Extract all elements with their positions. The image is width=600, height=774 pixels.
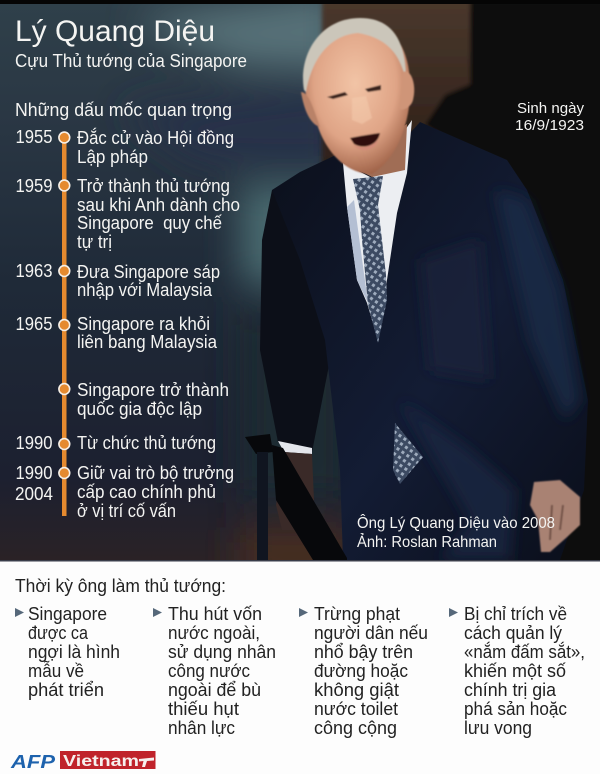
column 3: nước toilet [314, 699, 398, 719]
birth date: Sinh ngày [517, 100, 584, 117]
shirt [343, 120, 412, 340]
divider [0, 560, 600, 562]
milestone independence: Singapore trở thành [77, 380, 229, 400]
column 4: phá sản hoặc [464, 699, 567, 719]
timeline heading: Những dấu mốc quan trọng [15, 100, 232, 120]
column 4: chính trị gia [464, 680, 557, 700]
head [301, 18, 414, 174]
photo caption: Ông Lý Quang Diệu vào 2008 [357, 513, 555, 532]
column 1: phát triển [28, 680, 104, 700]
logo: Vietnam+ [60, 751, 156, 770]
column 4 [449, 604, 585, 738]
bullet [15, 608, 24, 617]
milestone 1959: tự trị [77, 232, 112, 252]
milestone 1990-2004 [15, 463, 234, 521]
column 2: nước ngoài, [168, 623, 260, 643]
column 4: Bị chỉ trích về [464, 604, 567, 624]
photo: statesman figure [245, 18, 588, 560]
milestone 1955 [16, 127, 234, 167]
photo caption [357, 513, 555, 551]
column 1: ngợi là hình [28, 642, 120, 662]
milestone 1990-2004: 2004 [15, 484, 53, 504]
milestone 1990-2004: Giữ vai trò bộ trưởng [77, 463, 234, 483]
column 4: «nắm đấm sắt», [464, 641, 585, 662]
column 2: ngoài để bù [168, 680, 261, 700]
milestone 1965: Singapore ra khỏi [77, 314, 210, 334]
milestone 1955: Đắc cử vào Hội đồng [77, 127, 234, 148]
column 3: không giật [314, 680, 399, 700]
tie [353, 176, 387, 343]
timeline line [62, 137, 66, 516]
milestone 1963: 1963 [16, 261, 52, 281]
column 4: khiến một số [464, 661, 566, 681]
column 3: Trừng phạt [314, 604, 400, 624]
milestone 1963: nhập với Malaysia [77, 280, 213, 300]
suit jacket [272, 122, 588, 560]
milestone 1955: 1955 [16, 127, 52, 147]
ears [402, 71, 416, 109]
milestone 1959: Singapore quy chế [77, 213, 222, 233]
bullet [153, 608, 162, 617]
neck [362, 124, 407, 177]
milestone 1965: liên bang Malaysia [77, 332, 218, 352]
right hand [530, 480, 580, 552]
title: Lý Quang Diệu [15, 15, 215, 48]
column 3: đường hoặc [314, 661, 408, 681]
column 1: Singapore [28, 604, 107, 624]
milestone 1959: Trở thành thủ tướng [77, 176, 230, 196]
column 3: nhổ bậy trên [314, 642, 413, 662]
section heading: Thời kỳ ông làm thủ tướng: [15, 576, 226, 596]
column 2 [153, 604, 276, 738]
column 3 [299, 604, 428, 738]
milestone 1963: Đưa Singapore sáp [77, 262, 220, 282]
hair [303, 18, 406, 92]
column 3: công cộng [314, 718, 397, 738]
column 1: được ca [28, 623, 89, 643]
bullet [449, 608, 458, 617]
milestone 1955: Lập pháp [77, 147, 148, 167]
mouth [350, 133, 380, 147]
milestone 1965: 1965 [16, 314, 52, 334]
column 2: sử dụng nhân [168, 642, 276, 662]
bullet [299, 608, 308, 617]
milestone 1990 [16, 433, 216, 453]
left arm [260, 190, 328, 452]
milestone 1990: Từ chức thủ tướng [77, 433, 216, 453]
milestone 1959: 1959 [16, 176, 52, 196]
timeline [15, 127, 240, 521]
nose [352, 96, 372, 124]
milestone independence [77, 380, 229, 419]
timeline dots [59, 132, 70, 478]
column 2: nhân lực [168, 718, 235, 738]
stair rail [245, 434, 347, 560]
milestone 1963 [16, 261, 220, 300]
milestone independence: quốc gia độc lập [77, 399, 202, 419]
column 3: người dân nếu [314, 623, 428, 643]
eyes [327, 85, 381, 99]
column 4: lưu vong [464, 718, 532, 738]
milestone 1959 [16, 176, 240, 252]
column 4: cách quản lý [464, 623, 562, 643]
logo: AFP: AFP [10, 752, 56, 772]
column 2: Thu hút vốn [168, 604, 262, 624]
milestone 1990-2004: 1990 [16, 463, 52, 483]
birth date [515, 100, 584, 134]
top black bar [0, 0, 600, 4]
column 2: công nước [168, 661, 250, 681]
milestone 1990-2004: cấp cao chính phủ [77, 482, 216, 502]
left cuff and hand [276, 441, 314, 530]
logo: Vietnam+: Vietnam [63, 753, 139, 770]
lower tie [393, 423, 423, 484]
birth date: 16/9/1923 [515, 117, 584, 134]
panel: photo background [0, 0, 600, 580]
milestone 1959: sau khi Anh dành cho [77, 195, 240, 215]
milestone 1990: 1990 [16, 433, 52, 453]
column 1 [15, 604, 120, 700]
milestone 1990-2004: ở vị trí cố vấn [77, 501, 176, 521]
milestone 1965 [16, 314, 218, 352]
subtitle: Cựu Thủ tướng của Singapore [15, 51, 247, 71]
photo caption: Ảnh: Roslan Rahman [357, 532, 497, 551]
column 1: mẫu về [28, 660, 84, 681]
jacket highlights [400, 190, 580, 560]
column 2: thiếu hụt [168, 699, 239, 719]
